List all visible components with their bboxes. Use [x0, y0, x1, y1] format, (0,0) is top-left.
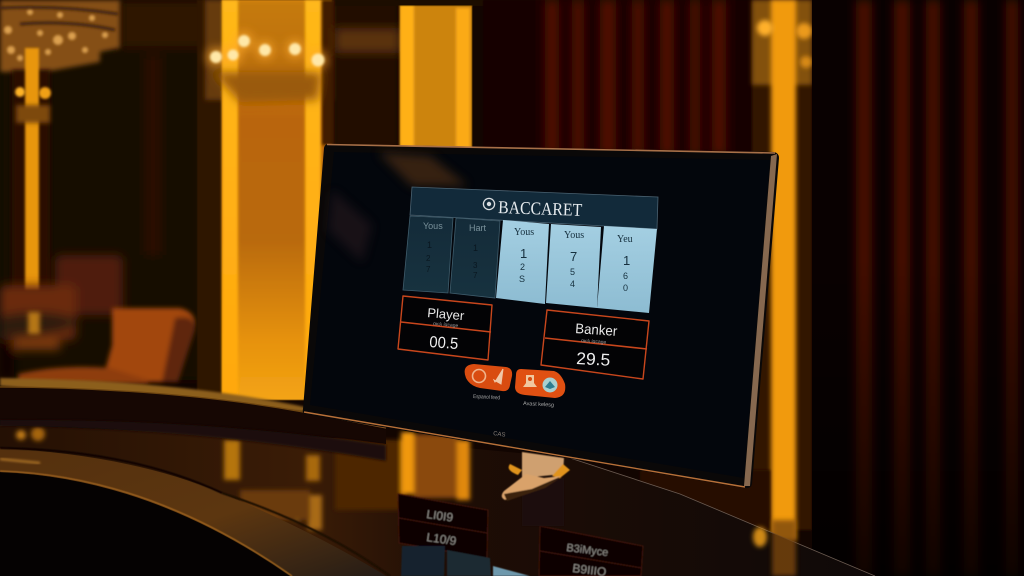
player score box: Player — [427, 305, 466, 323]
dark card 2: 3 — [473, 261, 478, 270]
light card 2: 7 — [570, 249, 577, 264]
light card 2: Yous — [564, 230, 584, 241]
icon: tool — [494, 369, 503, 384]
monitor stand with base — [502, 452, 570, 526]
light card 1: S — [519, 274, 525, 284]
heading icon — [483, 198, 495, 210]
dark card 1: 2 — [426, 254, 431, 263]
red curtain, right — [812, 0, 1024, 576]
screen reflection on table: LI0I9 — [426, 507, 454, 525]
screen glare — [378, 152, 468, 186]
dark card 1: 1 — [427, 240, 432, 250]
button caption 2: Avast kelesg — [523, 401, 554, 409]
light card 3: 0 — [623, 283, 628, 293]
light card 1 — [496, 220, 549, 304]
screen reflection on table: B3iMyce — [566, 542, 609, 559]
armchair near the pillar — [18, 308, 195, 384]
banker score box: ακιλ ίαcage — [581, 338, 607, 346]
dark card 2 — [450, 218, 500, 298]
banker score box: 29.5 — [576, 349, 611, 370]
red curtain, centre — [483, 0, 753, 155]
curved rail behind the table — [0, 378, 386, 461]
glossy table top — [0, 425, 875, 576]
light card 2: 5 — [570, 267, 575, 277]
table reflections: amber strips — [16, 427, 470, 530]
screen reflection on table — [398, 494, 643, 576]
icon: globe — [472, 370, 486, 382]
light card 3: Yeu — [617, 234, 633, 245]
light card 2: 4 — [570, 279, 575, 289]
player score box: 00.5 — [429, 334, 459, 353]
orange button 1 — [465, 364, 512, 391]
pendant lights on pillar — [207, 32, 327, 69]
dark card 1: Yous — [423, 221, 443, 231]
banker score box: Banker — [575, 320, 618, 339]
icon: figure — [523, 375, 537, 387]
amber pillar, left of screen — [197, 0, 335, 400]
dark card 1 — [403, 216, 453, 293]
heading text: BACCARET — [498, 197, 583, 220]
orange button 2 — [515, 369, 565, 398]
lower wall under screen, right — [640, 470, 770, 530]
button caption 1: Espanol feed — [473, 394, 500, 401]
dark card 2: 1 — [473, 243, 478, 253]
golden pillar, right of screen — [752, 0, 812, 540]
dark card 2: Hart — [469, 223, 487, 233]
light card 1: Yous — [514, 227, 534, 238]
banker score box — [541, 310, 649, 379]
monitor frame — [303, 144, 779, 488]
light card 2 — [546, 224, 601, 308]
light card 3: 1 — [623, 253, 630, 268]
light card 1: 2 — [520, 262, 525, 272]
light card 3 — [597, 226, 657, 313]
armchairs and side table — [0, 255, 123, 380]
curved front edge of table — [0, 448, 390, 576]
chandelier, left — [0, 0, 120, 72]
monitor logo: CAS — [493, 431, 506, 439]
game panel heading — [410, 187, 658, 229]
light card 3: 6 — [623, 271, 628, 281]
screen reflection on table: L10/9 — [426, 530, 458, 548]
dark card 2: 7 — [473, 271, 478, 280]
dark card 1: 7 — [426, 265, 431, 274]
floor lamp, left — [12, 48, 51, 290]
left dark drapes — [0, 0, 205, 380]
light card 1: 1 — [520, 246, 527, 261]
player score box — [398, 296, 492, 360]
icon: round teal badge — [542, 378, 558, 392]
central pillar — [335, 0, 555, 150]
player score box: ακιλ ίαcage — [433, 321, 459, 329]
